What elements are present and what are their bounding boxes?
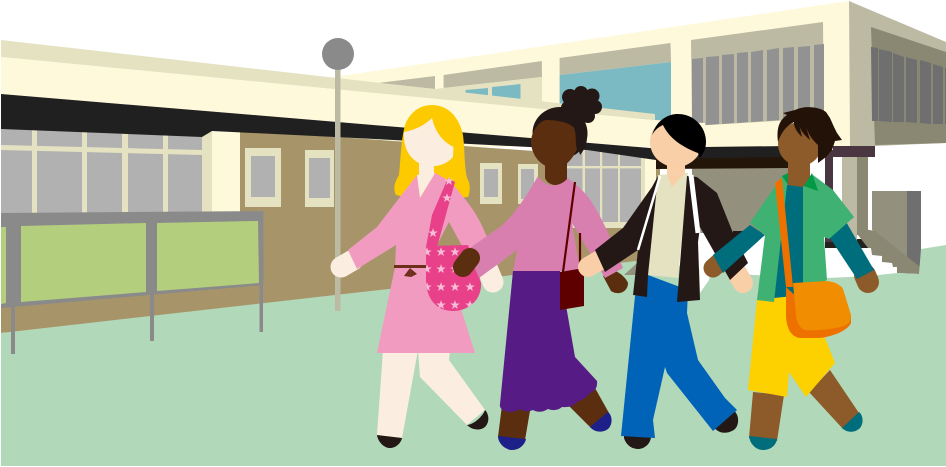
left wing windows <box>1 125 240 215</box>
upper storey of building <box>340 1 946 147</box>
person 3: black-haired person in black jacket and blue trousers <box>588 114 748 449</box>
fence <box>1 211 264 354</box>
person 2: girl in pink sweater and purple skirt <box>463 86 628 450</box>
left wing roof band and fascia <box>1 40 790 169</box>
ground floor back wall <box>692 146 875 248</box>
ground <box>1 245 946 466</box>
left wing brown wall <box>1 130 660 333</box>
stairs and concrete block <box>858 191 921 274</box>
lamp post <box>322 38 354 311</box>
grey paving wedge <box>624 263 637 275</box>
person 4: boy in green shirt and yellow shorts <box>713 107 874 450</box>
person 1: blonde girl in pink dress <box>341 105 500 448</box>
wall windows <box>245 148 656 228</box>
